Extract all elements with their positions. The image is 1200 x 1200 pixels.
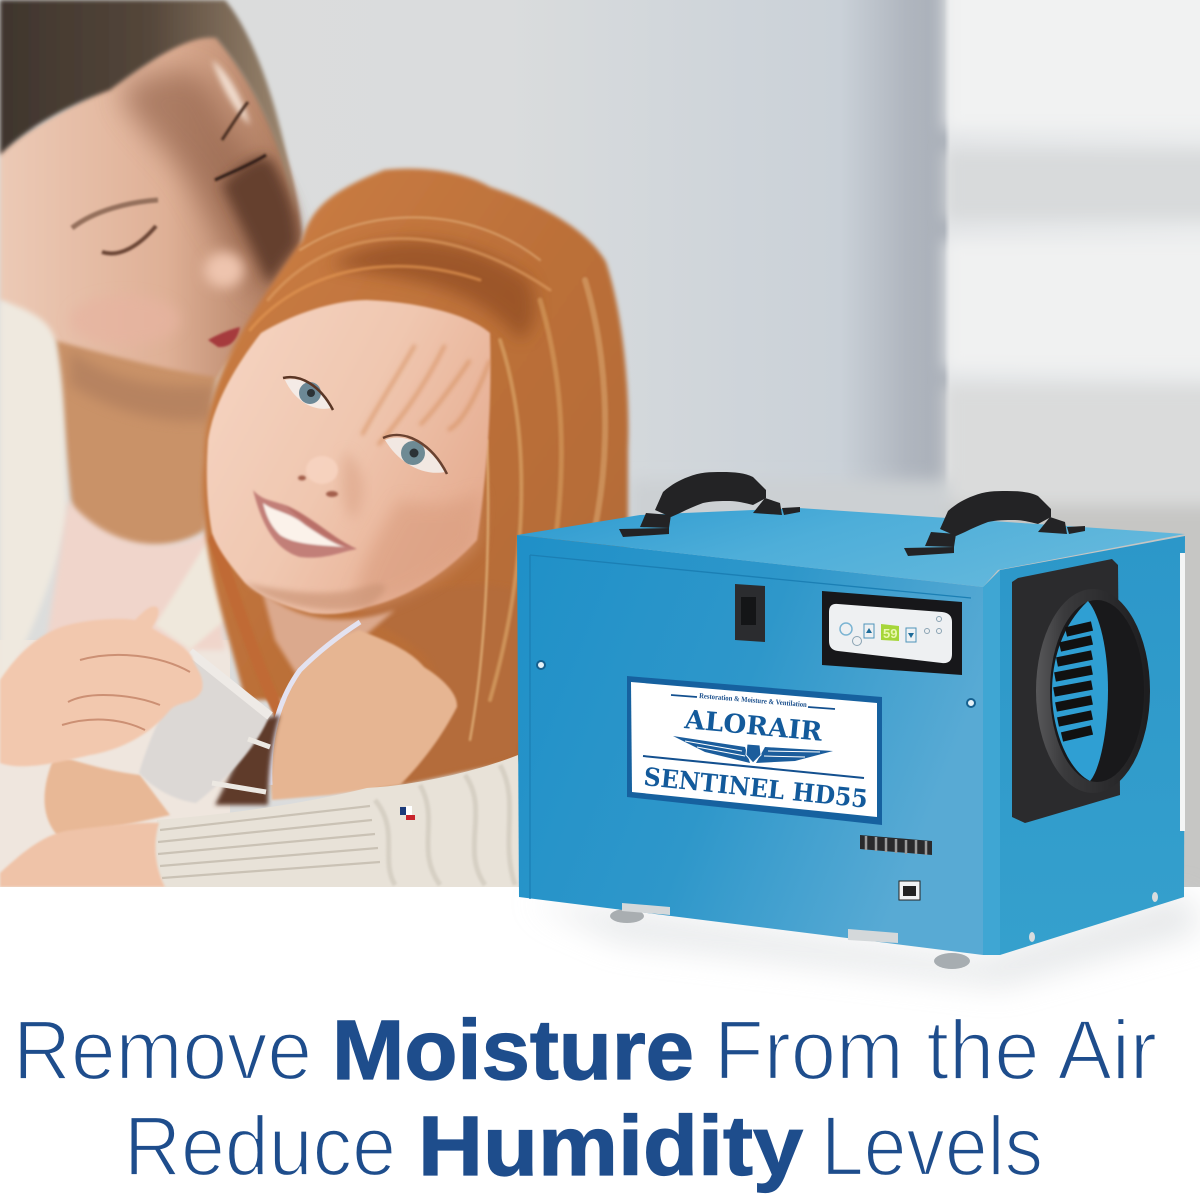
headline (13, 1003, 1157, 1193)
dark hair shade (330, 240, 535, 340)
terminal block (860, 835, 932, 855)
ethernet port (899, 881, 920, 900)
knit cable texture (375, 765, 515, 885)
hair behind shoulder (401, 762, 498, 784)
rear feet (610, 909, 970, 969)
side face (1000, 536, 1185, 955)
woman's pink top (45, 500, 225, 650)
headline line 2 (124, 1099, 1043, 1193)
woman's neck and chest (54, 338, 222, 548)
woman's eyes and lips (72, 102, 266, 347)
woman (0, 0, 302, 690)
girl's shoulder (271, 630, 457, 800)
hair strands (215, 217, 605, 740)
dress strap (270, 622, 360, 785)
headline line 2: Reduce (124, 1099, 396, 1193)
buttons (840, 623, 852, 635)
headline line 2: Humidity (418, 1099, 803, 1193)
sweater logo (400, 806, 415, 820)
headline line 1: Moisture (332, 1003, 694, 1097)
finger lines (62, 655, 190, 730)
vent ring (1036, 589, 1150, 793)
label plate (627, 676, 882, 825)
vent opening (1052, 601, 1108, 781)
side white strip (1180, 553, 1185, 831)
headline line 1: Remove (13, 1003, 312, 1097)
screws (537, 661, 975, 707)
hand and mug (0, 606, 270, 887)
girl's face (207, 300, 490, 614)
forehead highlight (212, 60, 250, 125)
headline line 2: Levels (821, 1099, 1043, 1193)
girl (155, 169, 628, 887)
nose shadow (342, 450, 364, 520)
side vent (1012, 559, 1150, 823)
tagline: Restoration & Moisture & Ventilation (699, 691, 808, 709)
fringe strands (362, 345, 490, 445)
headline line 1 (13, 1003, 1157, 1097)
top face (517, 508, 1185, 587)
louvers (1054, 626, 1092, 737)
chin shadow (245, 583, 385, 610)
girl's smile (253, 490, 357, 558)
mug (139, 653, 269, 803)
girl's hair (202, 169, 628, 790)
cuff ribbing (158, 806, 380, 878)
display (881, 624, 899, 641)
handle left (619, 472, 800, 537)
photo background (0, 0, 1200, 905)
vent inner tube (1050, 600, 1144, 782)
vent bracket (1012, 559, 1120, 823)
control panel (822, 591, 962, 675)
brand name: ALORAIR (682, 705, 824, 748)
front corner strip (983, 570, 1000, 955)
front face (517, 535, 983, 955)
girl's nose (298, 456, 338, 497)
woman's nose and cheek (200, 246, 250, 293)
woman's sweater (0, 300, 68, 640)
dark gap behind mug (215, 715, 280, 805)
woman's face (0, 33, 302, 377)
headline line 1: From the Air (714, 1003, 1157, 1097)
face shadow by hair (357, 490, 480, 607)
neck shadow (70, 350, 215, 421)
woman's hair (0, 0, 296, 215)
latch (735, 584, 765, 642)
control panel: 59 (883, 626, 897, 641)
dehumidifier (517, 472, 1185, 969)
model name: SENTINEL HD55 (642, 762, 869, 814)
front inner panel edge (530, 555, 971, 899)
hand (0, 606, 203, 766)
wings logo (673, 736, 833, 763)
handle right (904, 491, 1085, 556)
mug rim (190, 652, 270, 716)
mug handle (212, 739, 270, 792)
girl's eyes (283, 377, 447, 474)
sweater collar (156, 545, 222, 648)
light area behind the hand (0, 640, 230, 887)
label rule (643, 756, 864, 778)
girl's neck (261, 595, 394, 674)
lower arm (0, 823, 165, 887)
girl's arm (45, 755, 170, 840)
floor shadow (530, 895, 1200, 985)
dark shadow near the eye (222, 157, 298, 285)
girl's sweater sleeve (230, 755, 518, 887)
face shadow (120, 70, 292, 300)
side screws (1029, 892, 1158, 942)
front hinges (622, 903, 898, 943)
